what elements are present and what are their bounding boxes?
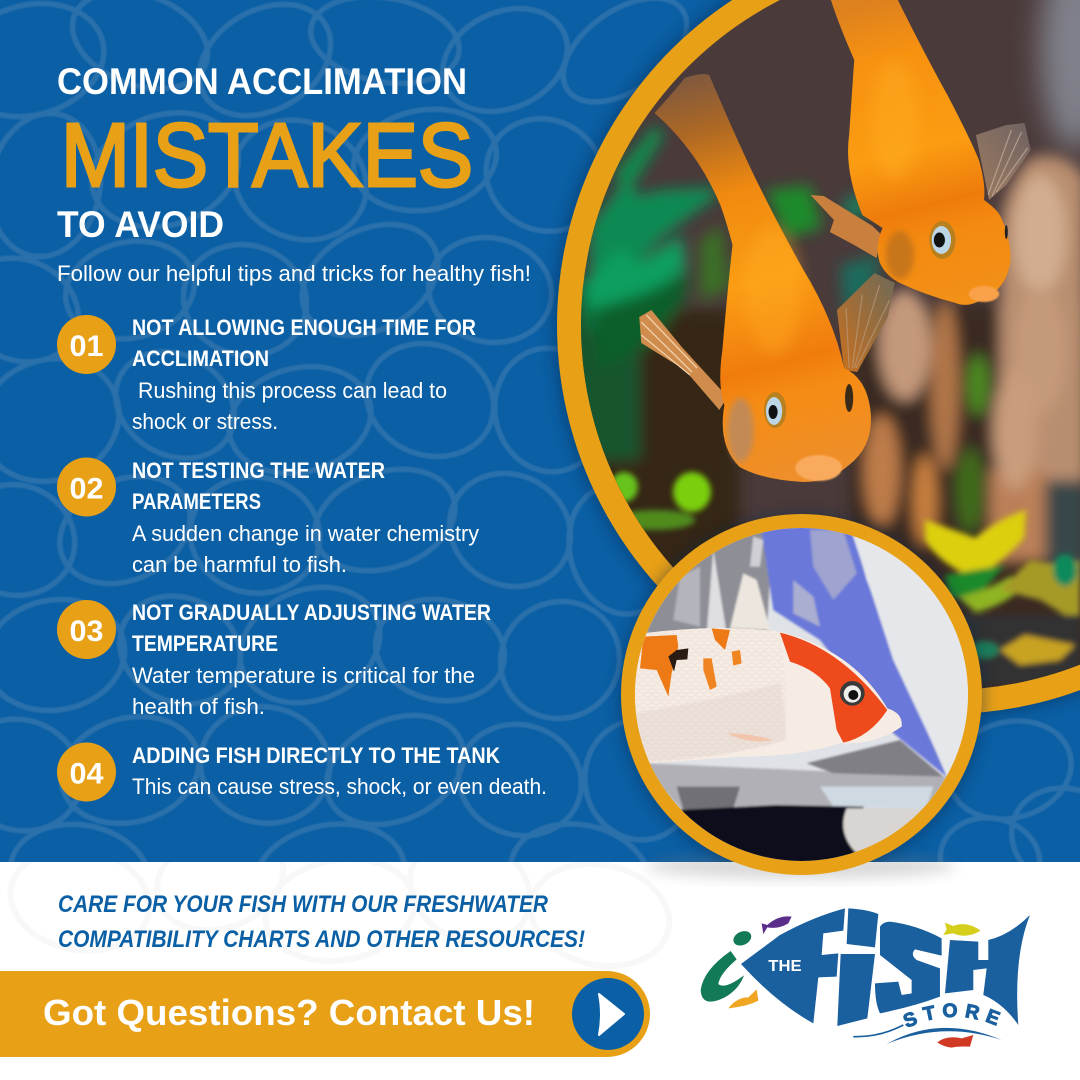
mistake 03: Water temperature is critical for the (132, 663, 475, 688)
logo fish silhouette lettering (741, 908, 1030, 1026)
title: COMMON ACCLIMATION (57, 61, 467, 102)
subtitle: Follow our helpful tips and tricks for healthy fish! (57, 261, 531, 286)
icon: play arrow (572, 978, 644, 1050)
mistake 03: NOT GRADUALLY ADJUSTING WATER (132, 600, 491, 625)
footer call to action text: COMPATIBILITY CHARTS AND OTHER RESOURCES! (58, 926, 585, 953)
contact button (0, 971, 650, 1057)
contact button: Got Questions? Contact Us! (43, 992, 535, 1033)
mistake 02 (57, 458, 479, 577)
footer call to action text (58, 891, 585, 953)
mistake 04: 04 (70, 758, 104, 790)
mistake 04: ADDING FISH DIRECTLY TO THE TANK (132, 743, 500, 768)
mistake 02: 02 (70, 472, 104, 506)
logo green i (701, 928, 754, 1002)
goldfish upper (811, 0, 1031, 305)
koi body (632, 628, 902, 763)
footer call to action text: CARE FOR YOUR FISH WITH OUR FRESHWATER (58, 891, 549, 918)
photo background: aquarium plants and rocks (560, 125, 1080, 710)
mistake 02: PARAMETERS (132, 489, 261, 514)
logo small fish (728, 916, 981, 1048)
mistake 02: A sudden change in water chemistry (132, 521, 479, 546)
mistake 01 (57, 315, 476, 434)
mistake 01: NOT ALLOWING ENOUGH TIME FOR (132, 315, 476, 340)
photo foreground plants (610, 472, 1080, 685)
logo: The Fish Store: STORE (903, 1003, 1001, 1027)
mistake 02: NOT TESTING THE WATER (132, 458, 385, 483)
mistake 03: TEMPERATURE (132, 631, 278, 656)
white footer band (642, 852, 954, 884)
logo: The Fish Store: THE (768, 958, 802, 975)
title: TO AVOID (57, 204, 224, 245)
large circular photo: goldfish with orange ring (553, 0, 1080, 718)
mistake 01: ACCLIMATION (132, 346, 269, 371)
mistake 02: can be harmful to fish. (132, 552, 347, 577)
title (57, 61, 473, 245)
mistake 03 (57, 600, 491, 719)
mistake 03: 03 (70, 615, 104, 648)
mistake 04: This can cause stress, shock, or even death. (132, 774, 547, 799)
title: MISTAKES (61, 106, 473, 206)
goldfish lower (639, 74, 895, 482)
small circular photo: koi in bag with orange ring (618, 513, 984, 879)
mistake 01: shock or stress. (132, 409, 278, 434)
mistake 04 (57, 742, 547, 802)
mistake 01: 01 (70, 330, 104, 363)
mistake 03: health of fish. (132, 694, 265, 719)
logo: The Fish Store (700, 908, 1030, 1048)
mistake 01: Rushing this process can lead to (138, 378, 447, 403)
